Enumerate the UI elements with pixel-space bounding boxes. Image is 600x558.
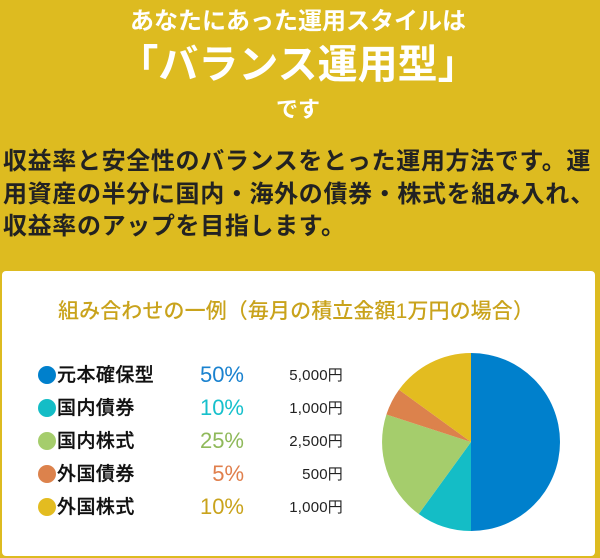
pie chart xyxy=(382,353,560,531)
slice: domestic stocks xyxy=(382,414,471,514)
slice: foreign stocks xyxy=(399,353,471,442)
icon: green dot xyxy=(38,432,56,450)
description text: 用資産の半分に国内・海外の債券・株式を組み入れ、 xyxy=(3,180,595,208)
percent: 25% xyxy=(200,428,244,453)
amount: 5,000円 xyxy=(289,367,343,384)
legend row: foreign bonds xyxy=(38,461,343,486)
label: 国内債券 xyxy=(57,398,135,419)
slice: foreign bonds xyxy=(386,390,471,442)
panel heading: 組み合わせの一例（毎月の積立金額1万円の場合） xyxy=(58,300,534,323)
icon: yellow dot xyxy=(38,498,56,516)
icon: blue dot xyxy=(38,366,56,384)
percent: 10% xyxy=(200,494,244,519)
slice: principal guaranteed xyxy=(471,353,560,531)
label: 外国株式 xyxy=(57,497,135,518)
label: 外国債券 xyxy=(57,464,135,485)
legend row: foreign stocks xyxy=(38,494,343,519)
slice: domestic bonds xyxy=(419,442,471,531)
percent: 10% xyxy=(200,395,244,420)
description text: 収益率と安全性のバランスをとった運用方法です。運 xyxy=(3,148,591,175)
amount: 2,500円 xyxy=(289,433,343,450)
label: 元本確保型 xyxy=(57,365,154,386)
title: balance style: 「バランス運用型」 xyxy=(118,43,478,87)
title line 3: です xyxy=(276,97,320,122)
title line 1: あなたにあった運用スタイルは xyxy=(130,8,466,35)
description text xyxy=(3,148,595,240)
panel: portfolio example xyxy=(2,271,595,556)
description text: 収益率のアップを目指します。 xyxy=(3,213,346,240)
icon: teal dot xyxy=(38,399,56,417)
amount: 1,000円 xyxy=(289,499,343,516)
label: 国内株式 xyxy=(57,431,135,452)
icon: orange dot xyxy=(38,465,56,483)
legend row: domestic bonds xyxy=(38,395,343,420)
percent: 5% xyxy=(212,461,244,486)
legend row: domestic stocks xyxy=(38,428,343,453)
percent: 50% xyxy=(200,362,244,387)
legend row: principal guaranteed xyxy=(38,362,343,387)
amount: 1,000円 xyxy=(289,400,343,417)
amount: 500円 xyxy=(302,466,343,483)
